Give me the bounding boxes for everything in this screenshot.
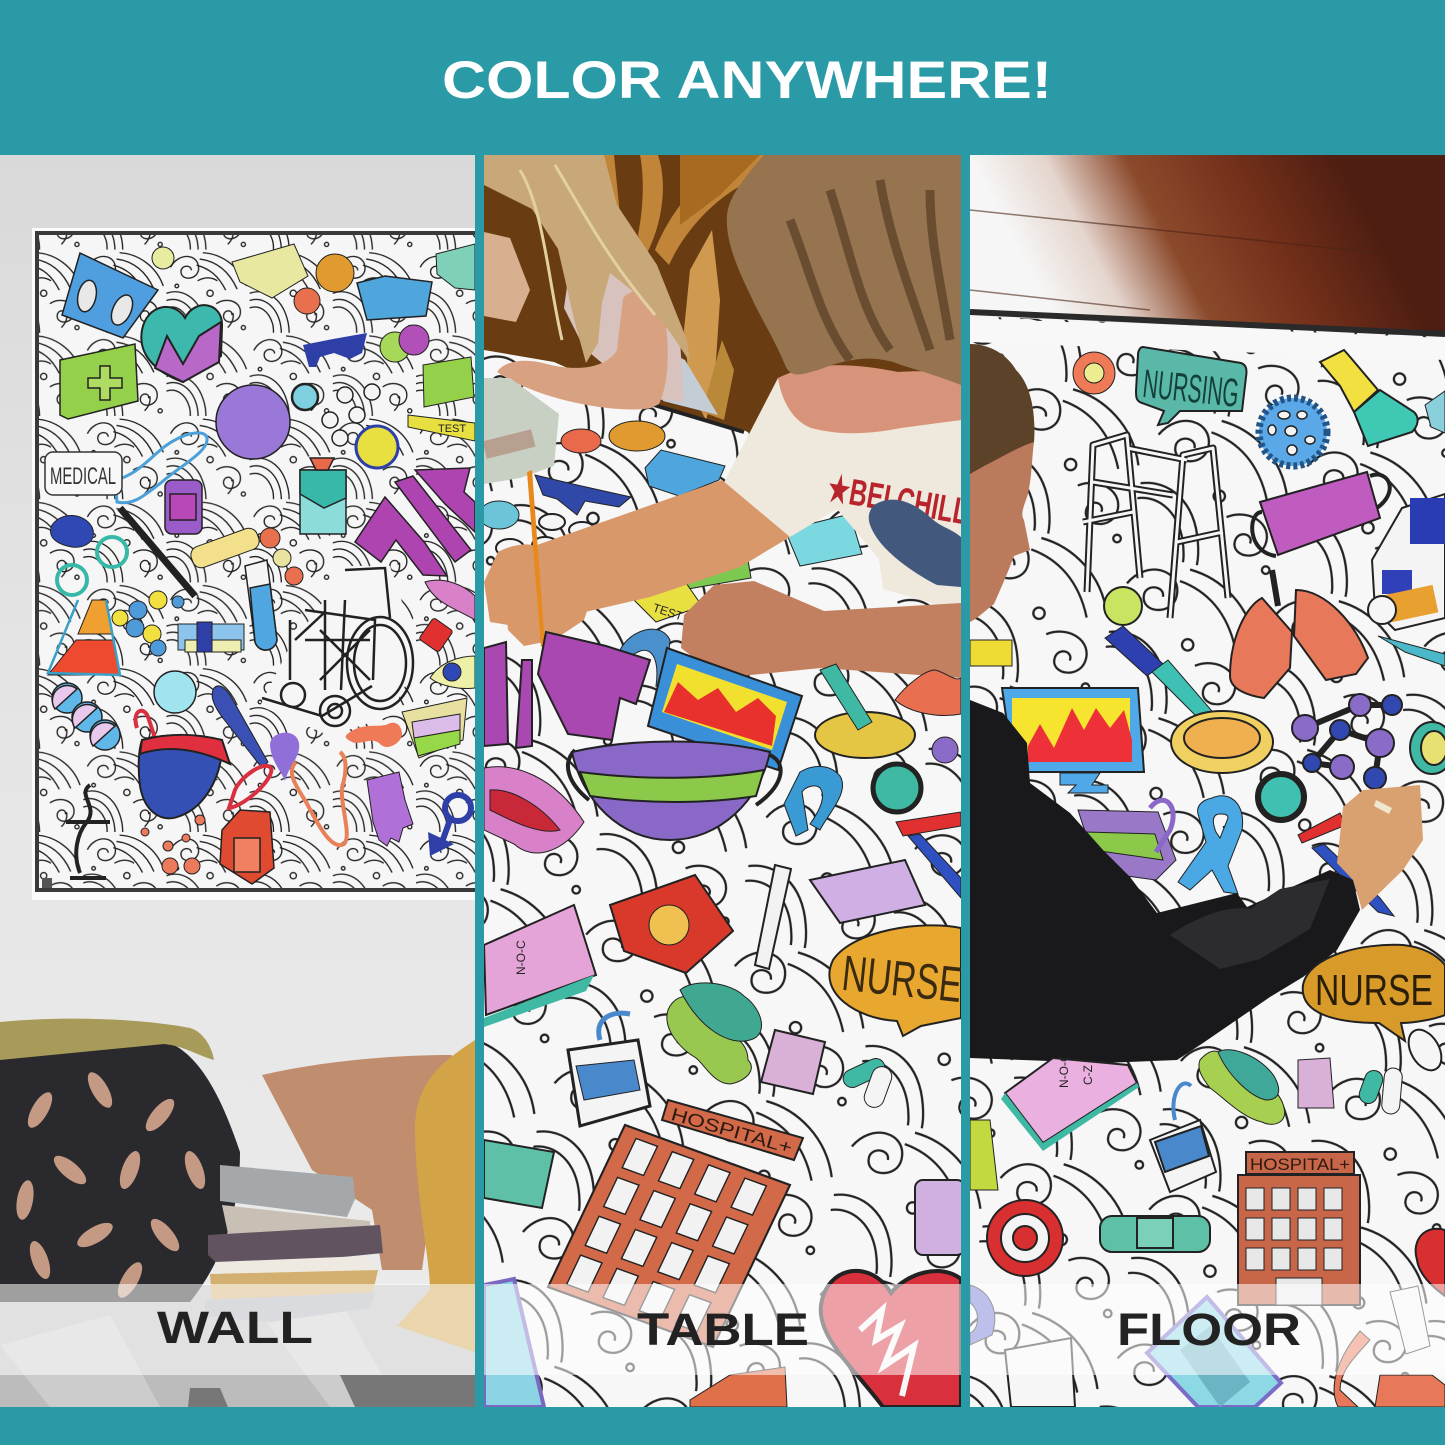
icon: orange virus [316, 254, 354, 292]
icon: test tube [245, 560, 277, 650]
red target [987, 1200, 1063, 1276]
lips [484, 767, 584, 853]
capsules [1357, 1067, 1403, 1115]
walker [1083, 435, 1228, 618]
panel: table [479, 155, 972, 1407]
icon: caduceus [66, 785, 110, 878]
blue drip bag [568, 1013, 650, 1126]
panel: wall [0, 155, 477, 1407]
thermometer [755, 865, 791, 969]
label: table: TABLE [637, 1304, 809, 1355]
head hair [970, 344, 1034, 474]
lilac notebook [810, 860, 925, 923]
icon: bandage roll [232, 244, 308, 298]
salmon spiral [1073, 352, 1115, 394]
poster top border [970, 312, 1445, 334]
icon: wheelchair [260, 566, 420, 736]
icon: molecule [112, 591, 184, 656]
bug cell [1410, 722, 1445, 774]
blue drip bag [1150, 1083, 1216, 1192]
molecule purple [1292, 694, 1402, 789]
poster icon: sunglasses [535, 475, 631, 515]
teal tablet [484, 1279, 544, 1407]
icon: pills [52, 683, 120, 750]
heart monitor [648, 648, 802, 770]
girl shirt [564, 260, 684, 402]
icon: glove [367, 772, 413, 846]
icon: bandaid [190, 528, 260, 568]
microscope [1334, 1286, 1445, 1407]
teal scissors [1378, 636, 1445, 666]
icon: first aid kit [60, 344, 138, 419]
icon: arrow head [428, 832, 454, 856]
icon: blue ring [292, 384, 318, 410]
icon: QR code [42, 878, 52, 888]
icon: test strip: TEST [438, 423, 466, 435]
poster icon: green paper [671, 542, 751, 592]
wall poster [32, 228, 477, 900]
pencil [527, 470, 545, 647]
icon: salmon spiral [294, 288, 320, 314]
icon: virus [154, 671, 196, 713]
nurse speech bubble [829, 925, 965, 1036]
label strip: wall [0, 1284, 475, 1375]
basket cloth [0, 1019, 214, 1060]
label: medical [45, 452, 122, 495]
sleeve highlight [1170, 879, 1330, 969]
poster icon: teal pad [785, 514, 862, 566]
girl arm [497, 290, 668, 410]
label: wall: WALL [157, 1302, 313, 1353]
boy shirt [720, 378, 961, 611]
wood floor [970, 155, 1445, 340]
red heart corner [1416, 1229, 1445, 1296]
hospital windows [1246, 1188, 1342, 1305]
purple ball [932, 737, 958, 763]
icon: bag [300, 458, 346, 534]
label: floor: FLOOR [1117, 1304, 1301, 1355]
icon: tray [402, 698, 467, 758]
icon: DNA strand [115, 433, 207, 503]
crutch [1298, 813, 1394, 916]
tag [1298, 1058, 1334, 1108]
virus spots [1268, 411, 1315, 455]
bean cell [1402, 1024, 1445, 1076]
purple scrubs [484, 632, 650, 748]
lilac corner item [915, 1180, 965, 1255]
girl hair [484, 155, 690, 363]
poster icon: blue ring [479, 501, 519, 529]
red bag [610, 875, 733, 973]
boy hair [727, 155, 961, 385]
teal ring [873, 764, 921, 812]
girl dress [663, 350, 718, 415]
nursing speech bubble: NURSING [1141, 362, 1241, 416]
icon: mask top right [436, 244, 475, 290]
icon: glasses [57, 537, 127, 595]
tablet diamond [1147, 1297, 1281, 1407]
ambulance [1368, 494, 1445, 630]
icon: purple drop [270, 733, 299, 781]
cushion [262, 1055, 452, 1270]
poster border [644, 402, 744, 432]
bandage [484, 1140, 554, 1208]
icon: test strip [408, 415, 475, 441]
wooden chairs background [484, 155, 961, 445]
icon: bottle [165, 480, 202, 534]
stack of books [205, 1165, 383, 1322]
bowl [1171, 711, 1273, 773]
green splat [667, 983, 761, 1084]
label strip: floor [970, 1284, 1445, 1375]
poster icon: cells [496, 514, 595, 557]
hospital building [548, 1125, 790, 1347]
virus [1259, 398, 1327, 466]
hand [1337, 785, 1423, 910]
flask [1320, 350, 1418, 446]
mask under arm [1078, 800, 1176, 880]
hospital sign: HOSPITAL+ [669, 1104, 795, 1158]
big red heart [821, 1271, 961, 1407]
blue arc [970, 1285, 995, 1345]
icon: cell cluster [322, 384, 380, 446]
shirt graphic [869, 500, 961, 587]
ribbon [1178, 796, 1243, 894]
hair strands [520, 165, 655, 340]
blue arc [620, 629, 670, 686]
purple mask [1252, 472, 1390, 556]
icon: salmon splash [346, 723, 402, 747]
shirt print [825, 468, 972, 587]
icon: bandage circle [216, 385, 290, 459]
title: COLOR ANYWHERE! [442, 51, 1052, 110]
poster icon: salmon spiral [561, 429, 601, 453]
icon: kit box [357, 276, 432, 320]
hospital sign [662, 1100, 803, 1160]
light blue mask [1425, 391, 1445, 433]
lime square [970, 1120, 998, 1190]
basket [0, 1042, 240, 1302]
icon: gender symbol [442, 795, 471, 842]
teal ring [1258, 774, 1304, 820]
lungs [1230, 570, 1368, 698]
paper note [1005, 1338, 1075, 1407]
floor rug [0, 1285, 475, 1407]
icon: eye [430, 656, 475, 689]
icon: small red vial [419, 617, 453, 653]
icon: sunglasses [303, 333, 367, 367]
blue ribbon [784, 766, 843, 836]
nurse speech bubble [1303, 945, 1445, 1041]
icon: blue cloud [51, 515, 93, 547]
bin contents [483, 429, 535, 459]
label strip: table [484, 1284, 961, 1375]
striped mask [568, 742, 781, 840]
boy arm [484, 480, 790, 627]
icon: pills [380, 325, 429, 362]
icon: heart [141, 305, 222, 382]
icon: capsule beads [260, 528, 303, 585]
lilac chart: N-O-C [514, 940, 528, 975]
icon: yellow spiral [152, 247, 174, 269]
lilac chart: N-O-C [1057, 1053, 1071, 1088]
lilac chart: C-Z [1081, 1065, 1095, 1085]
black sweater [970, 700, 1360, 1063]
chalk [1374, 800, 1392, 814]
boy hand [504, 560, 594, 646]
icon: scrubs [355, 468, 475, 576]
lung [895, 670, 961, 715]
shirt print: ★BEI CHILL [825, 468, 972, 533]
wall background [0, 155, 475, 1407]
hair strands [790, 180, 950, 360]
icon: syringe [120, 508, 195, 596]
icon: stethoscope [292, 752, 347, 845]
floor poster [970, 316, 1445, 1407]
pen [1105, 626, 1230, 740]
crutch [896, 812, 961, 898]
green splat [1199, 1050, 1285, 1124]
table poster [484, 350, 961, 1407]
test strip [632, 580, 702, 624]
capsules [840, 1056, 895, 1110]
boy face [778, 365, 961, 433]
lilac chart [1001, 1053, 1139, 1151]
tag [761, 1030, 825, 1094]
icon: thermometer [212, 686, 268, 768]
icon: flask [48, 600, 120, 675]
white margin [970, 318, 1445, 360]
icon: petri dish [356, 426, 398, 468]
lime spiral [1104, 587, 1142, 625]
icon: orange bottle [220, 810, 274, 884]
icon: molecule salmon [141, 815, 205, 874]
poster icon: orange virus [609, 421, 665, 451]
icon: green pad [423, 357, 474, 407]
orange bottle bottom [690, 1367, 787, 1407]
lilac chart [484, 905, 596, 1027]
hospital: HOSPITAL+ [1250, 1155, 1350, 1174]
nurse speech bubble: NURSE [840, 945, 965, 1013]
icon: lips [425, 580, 475, 620]
pestle and bowl [815, 664, 915, 758]
test strip: TEST [651, 601, 685, 624]
bandage [1100, 1216, 1210, 1252]
icon: face mask [136, 711, 271, 818]
hospital [1238, 1152, 1360, 1305]
icon: vial [178, 622, 244, 652]
plastic bin [484, 378, 559, 484]
nursing speech bubble [1136, 347, 1246, 425]
yellow chair [397, 1040, 475, 1352]
yellow tube [970, 640, 1012, 666]
poster icon: kit box [645, 450, 725, 496]
panel: floor [970, 155, 1445, 1407]
label: medical: MEDICAL [50, 463, 116, 490]
boy other hand and arm [681, 581, 961, 678]
girl face [484, 232, 530, 322]
hospital windows [567, 1138, 766, 1332]
icon: scale [62, 253, 158, 338]
monitor [1002, 688, 1144, 793]
head [970, 344, 1034, 622]
basket leaf pattern [14, 1069, 209, 1301]
